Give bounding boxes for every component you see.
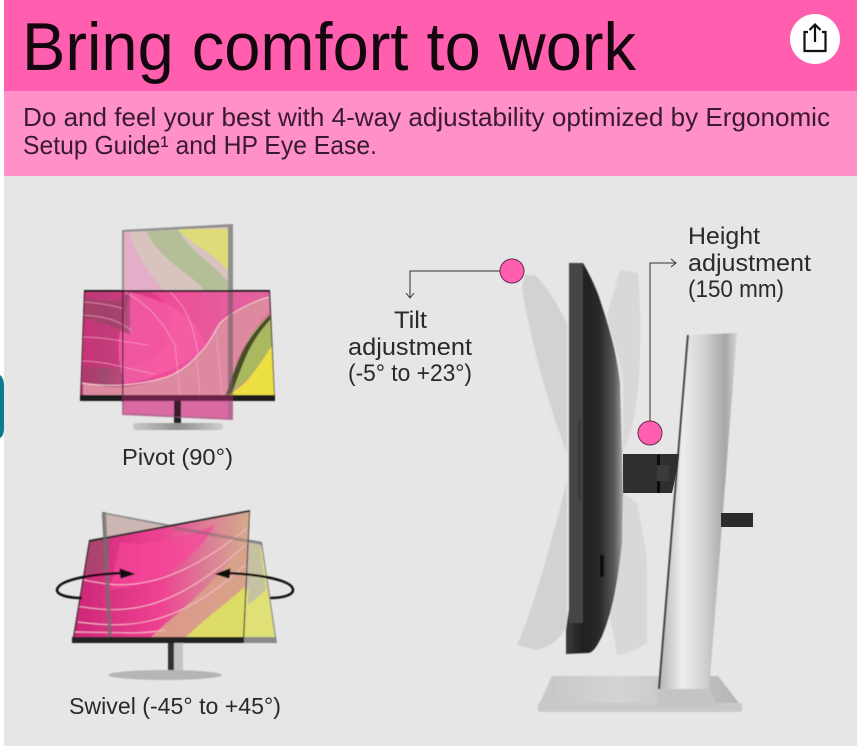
pivot illustration: [80, 224, 276, 430]
tilt label: (-5° to +23°): [348, 360, 472, 387]
height label: adjustment: [688, 250, 811, 277]
swivel illustration: [57, 510, 293, 680]
pivot label: Pivot (90°): [122, 444, 233, 470]
side view monitor illustration: [406, 259, 753, 712]
height leader arrow: [650, 259, 676, 421]
tilt label: Tilt: [394, 307, 427, 334]
stand rear tab: [721, 513, 753, 527]
tilt ghost right: [607, 270, 647, 655]
height callout dot: [638, 421, 662, 445]
subtitle line two: Setup Guide¹ and HP Eye Ease.: [23, 130, 377, 160]
page background panel: [4, 176, 857, 746]
swivel stand: [108, 643, 222, 680]
landscape monitor: [80, 290, 276, 402]
stand pillar: [657, 333, 737, 707]
portrait monitor ghost: [122, 224, 233, 420]
share button: [790, 14, 840, 64]
subtitle banner: [4, 91, 857, 176]
swivel arrows: [57, 569, 293, 598]
tilt callout dot: [500, 259, 524, 283]
tilt ghost left: [517, 275, 567, 650]
monitor body side: [566, 263, 623, 654]
swivel label: Swivel (-45° to +45°): [69, 693, 281, 719]
height label: (150 mm): [688, 276, 784, 303]
base: [538, 676, 742, 712]
height label: [688, 223, 811, 303]
title: Bring comfort to work: [22, 9, 637, 85]
pivot stand: [133, 400, 223, 430]
carousel tab: [0, 375, 4, 438]
swivel front monitor: [70, 510, 277, 643]
tilt label: [348, 307, 472, 387]
tilt leader arrow: [406, 271, 500, 298]
swivel back monitor: [100, 510, 280, 643]
tilt label: adjustment: [348, 334, 472, 361]
title banner: [4, 0, 857, 91]
hinge bracket: [623, 454, 679, 493]
subtitle line one: Do and feel your best with 4-way adjustability optimized by Ergonomic: [23, 102, 830, 132]
height label: Height: [688, 223, 760, 250]
